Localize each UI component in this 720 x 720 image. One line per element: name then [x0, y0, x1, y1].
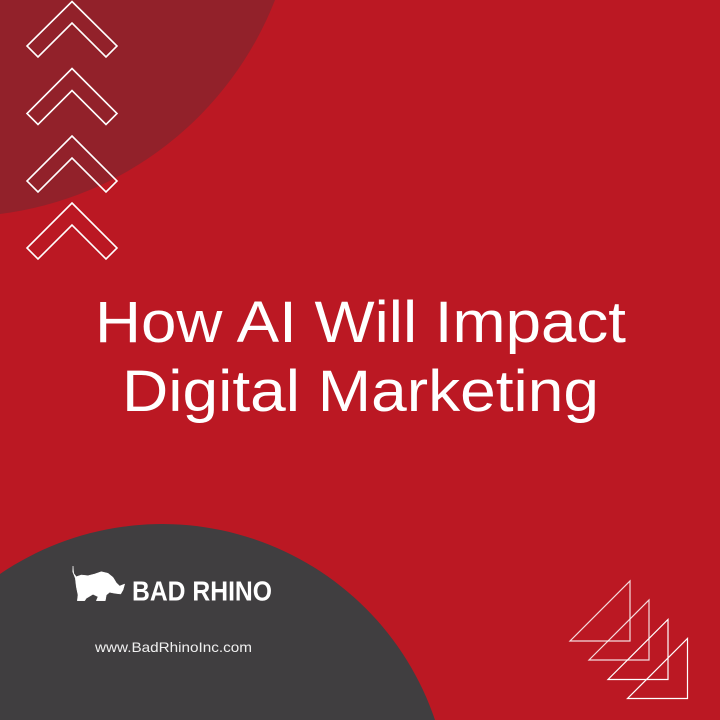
logo wordmark: BAD RHINO	[132, 576, 272, 606]
icon: stacked upward chevrons	[27, 2, 117, 259]
triangle 3	[608, 620, 668, 680]
icon: overlapping triangles	[570, 581, 688, 698]
panel: charcoal circle bottom-left	[0, 524, 435, 720]
triangle 1	[570, 581, 630, 641]
triangle 4	[628, 638, 688, 698]
chevron 3	[27, 136, 117, 192]
title line 1: How AI Will Impact	[95, 290, 626, 355]
title	[95, 290, 626, 424]
icon: rhino silhouette	[73, 566, 125, 601]
logo: Bad Rhino	[73, 566, 272, 606]
chevron 2	[27, 68, 117, 124]
chevron 4	[27, 203, 117, 259]
triangle 2	[589, 600, 649, 660]
website url: www.BadRhinoInc.com	[94, 639, 252, 655]
chevron 1	[27, 2, 117, 57]
panel: dark red circle top-left	[0, 0, 275, 214]
title line 2: Digital Marketing	[122, 359, 599, 424]
